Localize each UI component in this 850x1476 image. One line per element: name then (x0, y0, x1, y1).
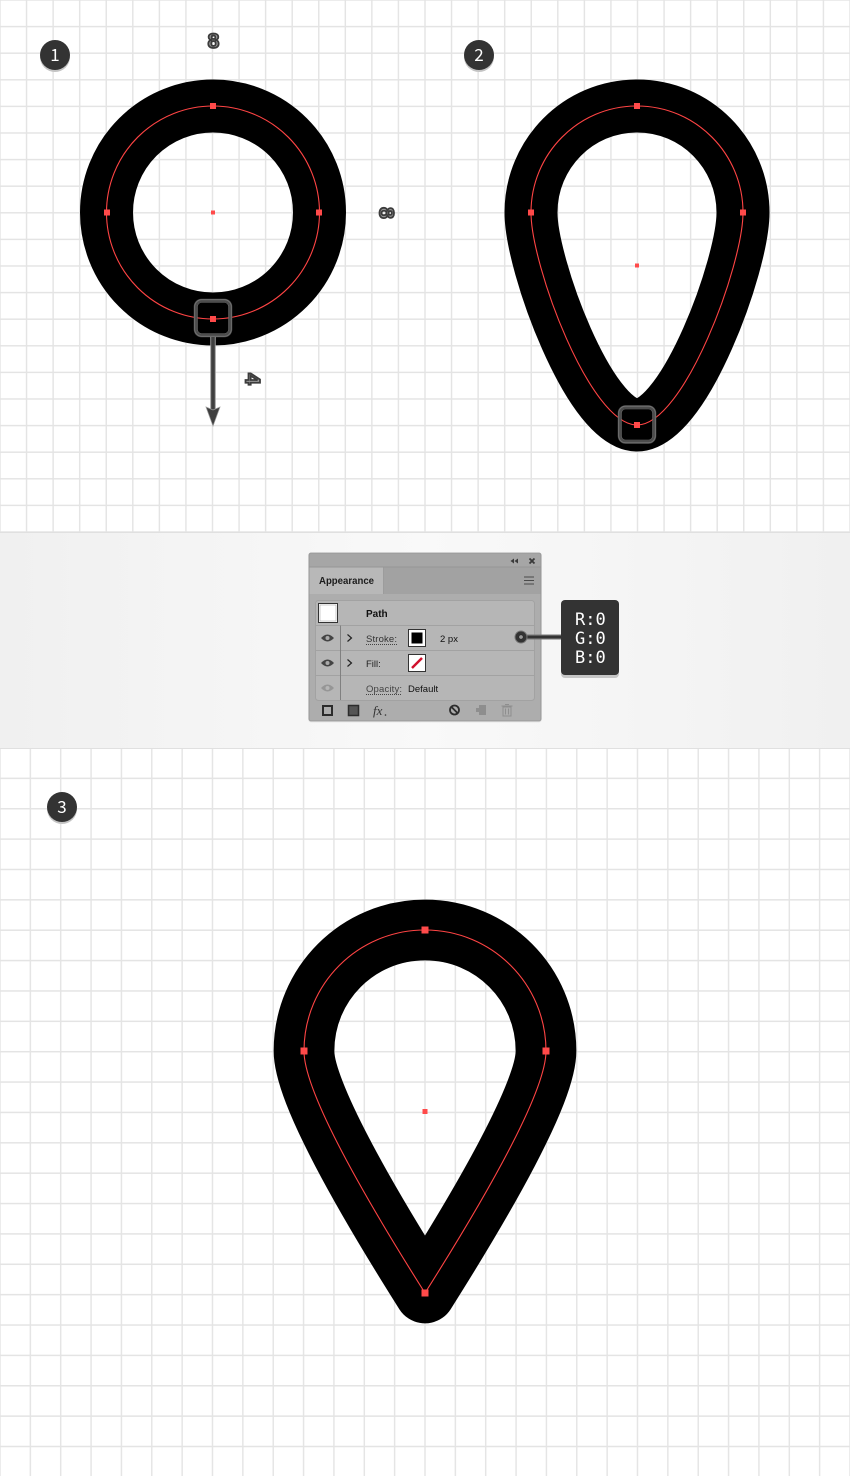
panel menu icon (524, 577, 534, 584)
row: Path: Path (366, 609, 388, 620)
egg centre path (531, 106, 743, 425)
shape 1 anchor points (104, 103, 322, 322)
step 1 badge (40, 40, 70, 72)
RGB callout (561, 600, 619, 678)
row: Opacity: Default (408, 684, 438, 695)
dimension label: 8 rotated right: 8 (374, 207, 398, 219)
row: Stroke: 2 px (440, 634, 458, 645)
row: Fill (321, 654, 426, 672)
appearance panel (308, 552, 542, 722)
shape 3 anchor points (300, 926, 550, 1296)
shape 3: map pin (304, 930, 546, 1293)
step 2 badge: 2 (474, 41, 484, 66)
step 2 badge (464, 40, 494, 72)
shape 2 anchor points (528, 103, 746, 428)
shape 1 selection box (195, 300, 231, 336)
rows list (316, 600, 534, 700)
step 3 badge (47, 792, 77, 824)
panel footer icons (323, 703, 512, 718)
pin centre path (304, 930, 546, 1293)
dimension label: 8 top: 8 (208, 30, 220, 53)
ring centre path (106, 106, 320, 319)
row: Stroke: Stroke: (366, 634, 397, 645)
panel top bar (310, 554, 540, 567)
row: Opacity (321, 684, 438, 695)
connector line with knob (515, 631, 561, 643)
row: Opacity: Opacity: (366, 684, 402, 695)
row: Fill: Fill: (366, 659, 381, 670)
RGB callout: G:0 (575, 629, 606, 649)
arrow: downward move (206, 337, 220, 426)
shape 2 selection box (619, 406, 655, 443)
tab row (310, 568, 540, 594)
shape 1: black ring (106, 106, 320, 319)
shape 2: egg (531, 106, 743, 425)
tab: Appearance: Appearance (319, 575, 374, 587)
step 1 badge: 1 (50, 41, 60, 66)
step 3 badge: 3 (57, 793, 67, 818)
row: Path (318, 604, 388, 622)
dimension label: 4 rotated: 4 (240, 373, 264, 385)
RGB callout: R:0 (575, 610, 606, 630)
row: Stroke (321, 630, 458, 646)
RGB callout: B:0 (575, 648, 606, 668)
panel footer icons: fx (373, 703, 383, 718)
tab: Appearance (310, 568, 384, 594)
